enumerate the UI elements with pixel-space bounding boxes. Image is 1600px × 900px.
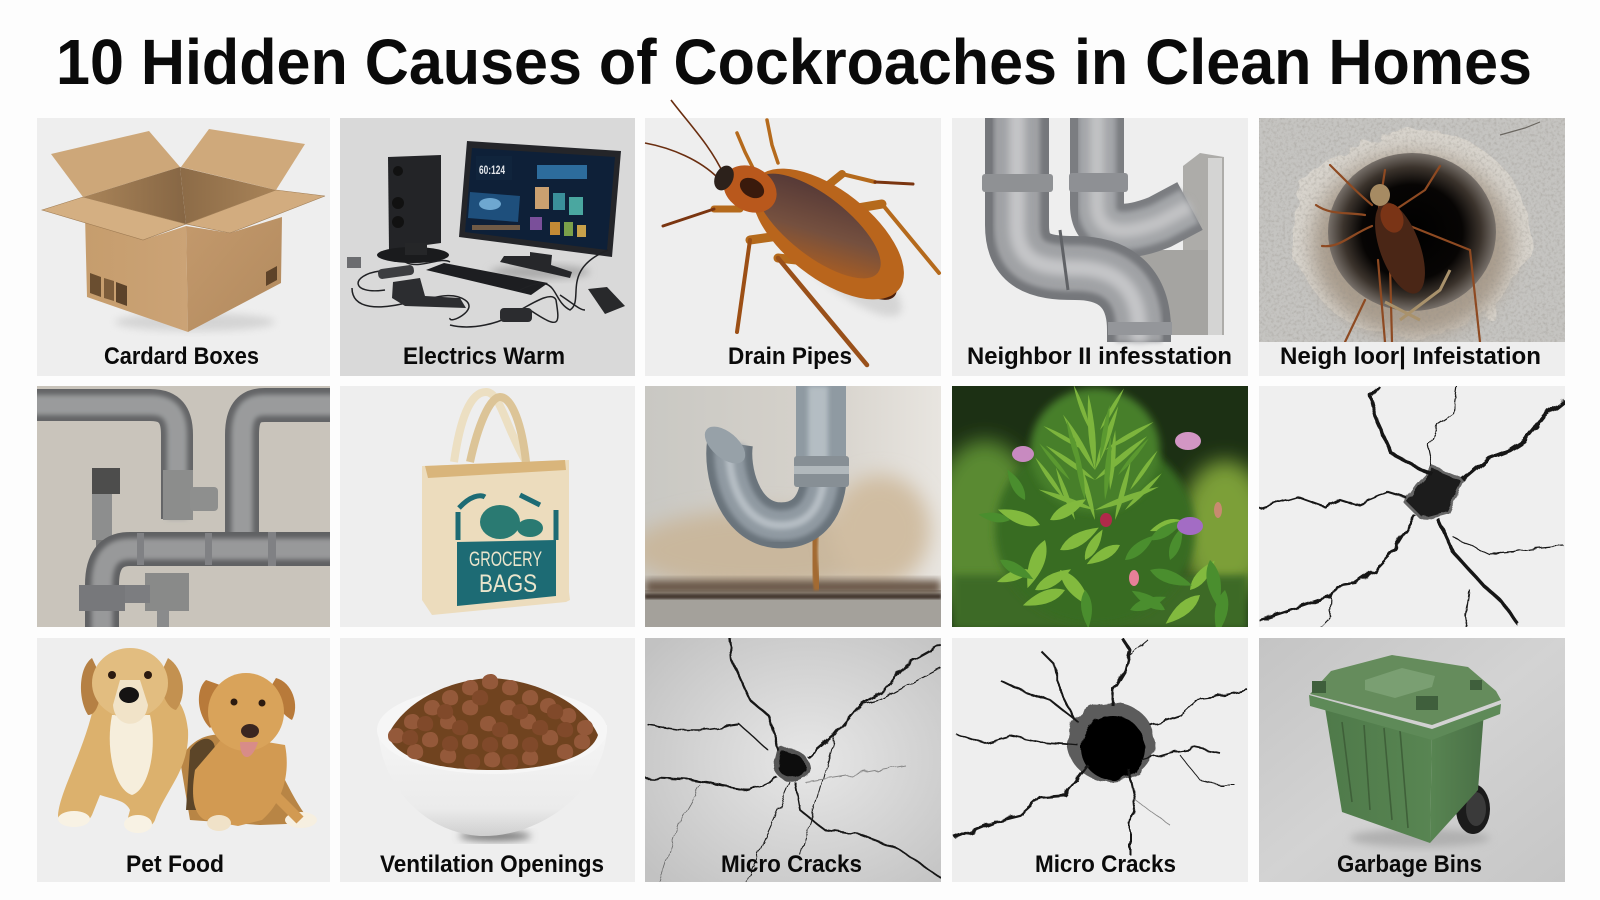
icon: computer setup xyxy=(347,141,625,327)
label: Garbage Bins xyxy=(1337,851,1482,878)
label: Cardard Boxes xyxy=(104,343,259,370)
label: Micro Cracks xyxy=(721,851,862,878)
panel: foliage xyxy=(952,386,1248,627)
label: Electrics Warm xyxy=(403,343,565,370)
icon: leafy plant with flowers xyxy=(952,386,1248,627)
panel: wall pipes xyxy=(37,386,330,627)
icon: grocery tote bag: GROCERY xyxy=(469,548,542,571)
panel: pet food dogs xyxy=(37,638,330,882)
panel: ventilation openings kibble xyxy=(340,638,635,882)
label: Neigh loor| Infeistation xyxy=(1280,343,1541,370)
icon: green wheelie bin xyxy=(1309,655,1501,847)
icon: cockroach xyxy=(645,100,939,365)
panel: neighbor infestation hole xyxy=(1259,118,1565,376)
icon: metal drain pipes xyxy=(982,100,1224,342)
label: Pet Food xyxy=(126,851,224,878)
icon: rusty u-bend on stained wall xyxy=(630,386,941,627)
panel: cardboard boxes xyxy=(37,118,330,376)
label: Neighbor II infesstation xyxy=(967,343,1232,370)
icon: bowl of kibble xyxy=(377,674,607,841)
icon: wall cracks xyxy=(1259,386,1564,627)
panel: drain pipes xyxy=(645,100,941,376)
icon: cardboard box xyxy=(42,129,325,332)
icon: galvanized pipes xyxy=(20,405,345,640)
panel: neighbor infestation pipes xyxy=(952,100,1248,376)
label: Ventilation Openings xyxy=(380,851,604,878)
icon: cockroach in wall hole xyxy=(1259,118,1565,342)
panel: grocery bags xyxy=(340,386,635,627)
icon: grocery tote bag: BAGS xyxy=(479,570,537,598)
icon: cracks from black hole xyxy=(955,638,1248,855)
label: Drain Pipes xyxy=(728,343,852,370)
icon: two dogs xyxy=(58,648,317,833)
panel: micro cracks hole xyxy=(952,638,1248,882)
label: Micro Cracks xyxy=(1035,851,1176,878)
icon: grocery tote bag xyxy=(422,392,570,615)
panel: electrics warm xyxy=(340,118,635,376)
panel: wall crack xyxy=(1259,386,1565,627)
icon: branching cracks xyxy=(645,638,941,882)
icon: computer setup: 60:124 xyxy=(479,163,505,177)
panel: pipe leak xyxy=(630,386,941,627)
panel: garbage bins xyxy=(1259,638,1565,882)
panel: micro cracks grey xyxy=(645,638,941,882)
title: 10 Hidden Causes of Cockroaches in Clean Homes xyxy=(56,26,1532,98)
